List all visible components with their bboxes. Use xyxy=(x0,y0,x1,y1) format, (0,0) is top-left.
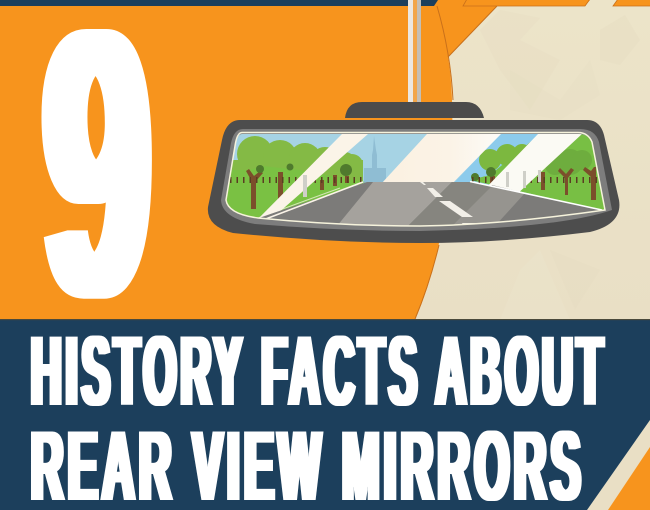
mirror inner rim xyxy=(221,129,612,231)
left trees canopy xyxy=(228,136,363,185)
road edge lines xyxy=(263,182,363,220)
tree tops xyxy=(256,164,496,181)
mirror housing xyxy=(208,120,619,243)
road xyxy=(260,182,599,226)
reflection stripes xyxy=(255,134,582,222)
pale trees in reflection xyxy=(303,170,541,197)
corner orange xyxy=(608,447,650,510)
navy title band xyxy=(0,319,650,510)
road reflection bands xyxy=(337,182,452,226)
beige textured panel xyxy=(415,0,650,320)
sky xyxy=(234,134,587,196)
city tower xyxy=(372,137,377,168)
top edge navy band xyxy=(0,0,438,6)
right grass and trees xyxy=(470,134,610,212)
trunks xyxy=(246,167,596,209)
mirror mount stem xyxy=(408,0,421,106)
mirror mount base xyxy=(345,102,484,118)
mirror glass scene xyxy=(226,134,604,226)
road centre dashes xyxy=(420,182,476,224)
fence xyxy=(230,177,604,183)
corner stripe xyxy=(587,420,650,510)
orange background xyxy=(0,0,650,320)
rear view mirror xyxy=(208,102,619,243)
glass rim highlight xyxy=(226,132,605,226)
title xyxy=(31,315,607,510)
top edge orange shapes xyxy=(463,0,650,6)
left grass xyxy=(226,166,365,218)
